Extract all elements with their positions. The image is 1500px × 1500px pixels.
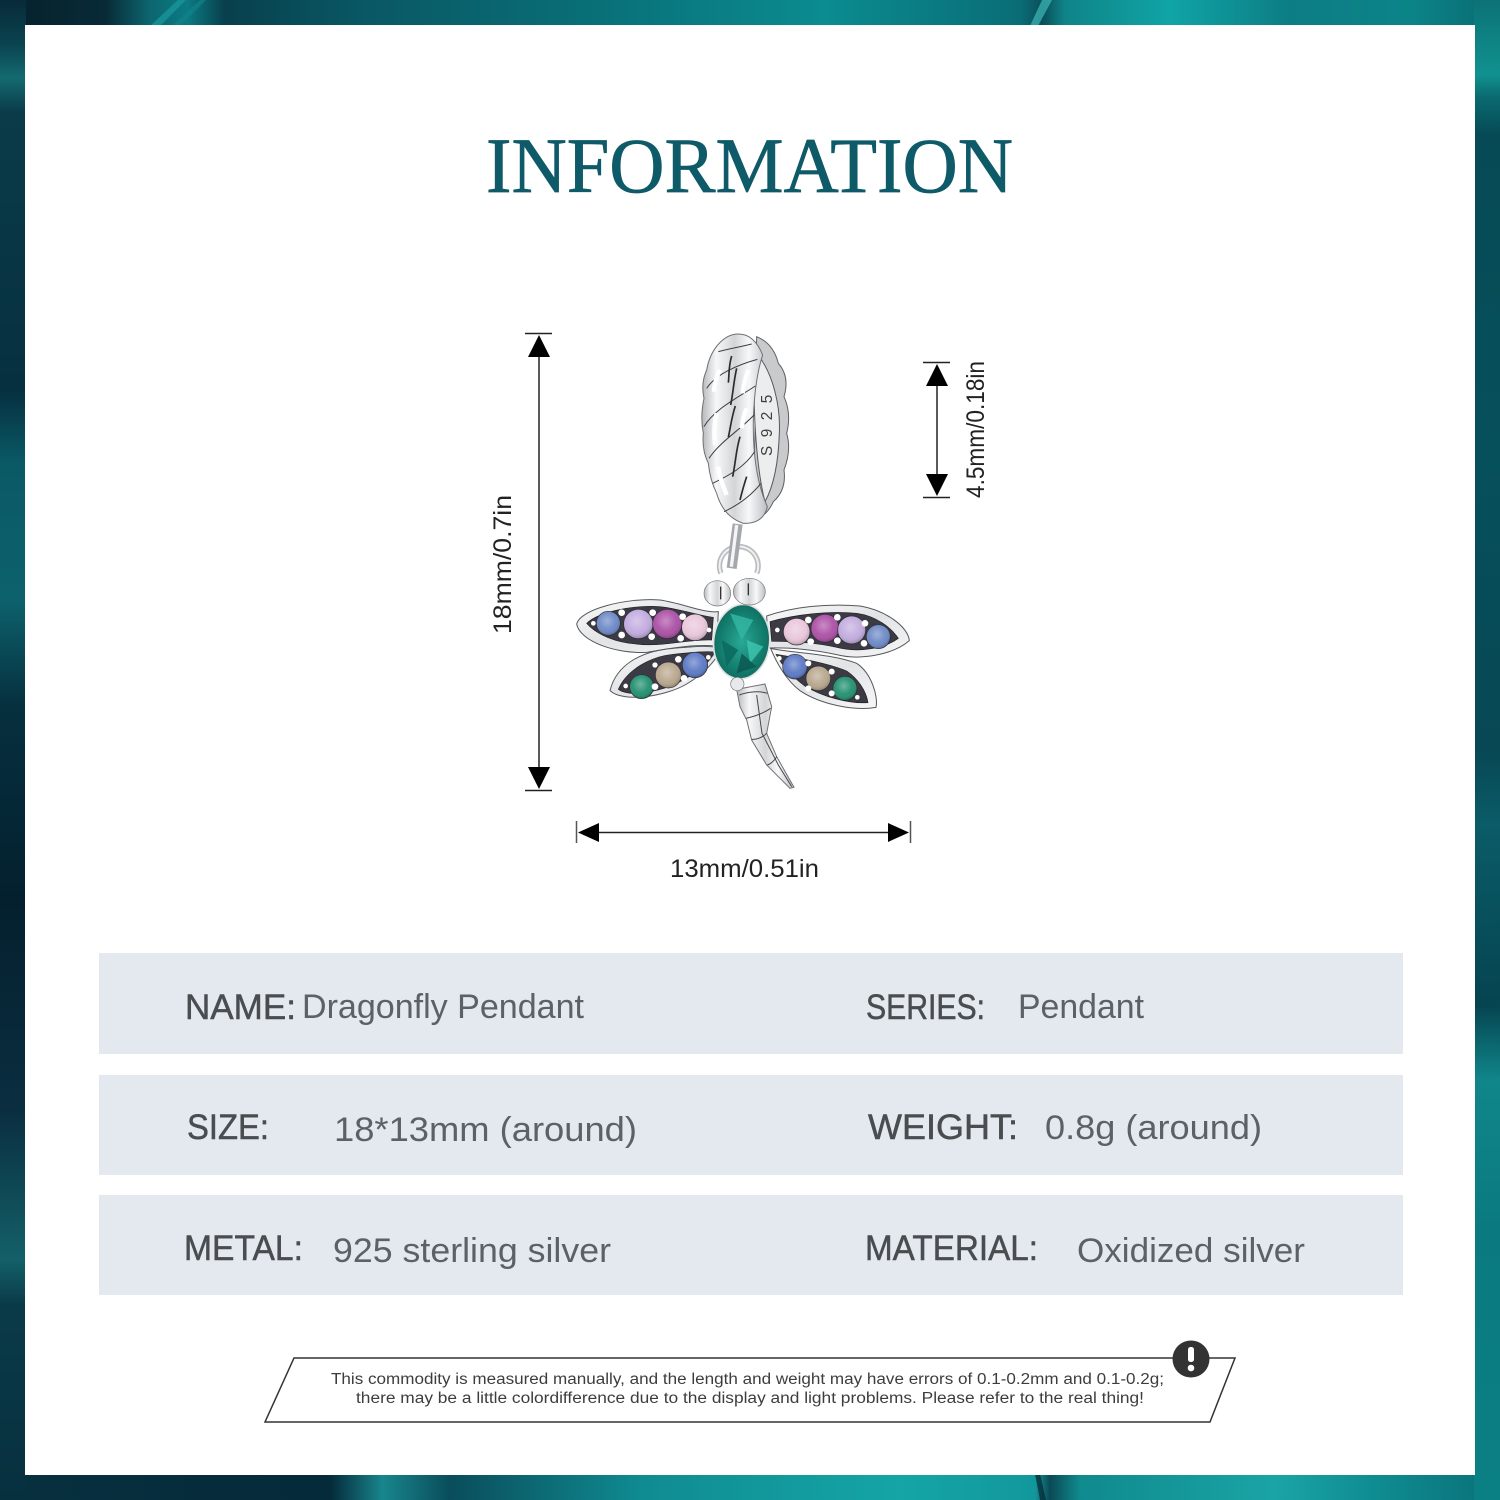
icon: warning bbox=[1172, 1340, 1210, 1378]
dimension: width: 13mm/0.51in bbox=[670, 855, 819, 883]
info row: metal and material: 925 sterling silver bbox=[333, 1232, 611, 1270]
info row: size and weight: SIZE: bbox=[187, 1108, 269, 1147]
tail bbox=[731, 677, 794, 788]
info row: size and weight: 0.8g (around) bbox=[1045, 1109, 1262, 1147]
rope bail: S925 bbox=[759, 395, 776, 456]
info row: metal and material: Oxidized silver bbox=[1077, 1232, 1305, 1270]
lower left wing bbox=[610, 646, 721, 699]
dimension: overall height bbox=[489, 334, 552, 790]
upper left wing bbox=[577, 600, 718, 652]
title: INFORMATION bbox=[486, 122, 1013, 209]
rope bail bbox=[702, 334, 789, 523]
dimension: overall height: 18mm/0.7in bbox=[489, 495, 517, 634]
dimension: bail height bbox=[923, 361, 990, 498]
info row: size and weight: WEIGHT: bbox=[868, 1108, 1018, 1147]
disclaimer box: This commodity is measured manually, and the length and weight may have errors of 0.1-0.2mm and 0.1-0.2g; bbox=[331, 1371, 1164, 1388]
eyes bbox=[704, 578, 765, 606]
upper right wing bbox=[767, 605, 909, 657]
info row: metal and material bbox=[99, 1195, 1403, 1295]
info row: size and weight bbox=[99, 1075, 1403, 1175]
disclaimer box: there may be a little colordifference due to the display and light problems. Please refer to the real thing! bbox=[356, 1390, 1144, 1407]
lower right wing bbox=[771, 648, 876, 708]
disclaimer box bbox=[265, 1358, 1235, 1422]
info row: name and series: Dragonfly Pendant bbox=[302, 988, 585, 1026]
info row: name and series: Pendant bbox=[1018, 988, 1145, 1026]
thorax gem bbox=[710, 602, 773, 682]
info row: name and series: NAME: bbox=[185, 988, 296, 1027]
info row: metal and material: METAL: bbox=[184, 1229, 303, 1268]
info row: metal and material: MATERIAL: bbox=[865, 1229, 1038, 1268]
info row: size and weight: 18*13mm (around) bbox=[334, 1111, 637, 1149]
dragonfly pendant bbox=[577, 334, 909, 788]
dimension: bail height: 4.5mm/0.18in bbox=[962, 361, 990, 498]
info row: name and series: SERIES: bbox=[866, 988, 985, 1027]
info row: name and series bbox=[99, 953, 1403, 1054]
jump ring connector bbox=[719, 524, 758, 573]
dimension: width bbox=[576, 821, 910, 883]
